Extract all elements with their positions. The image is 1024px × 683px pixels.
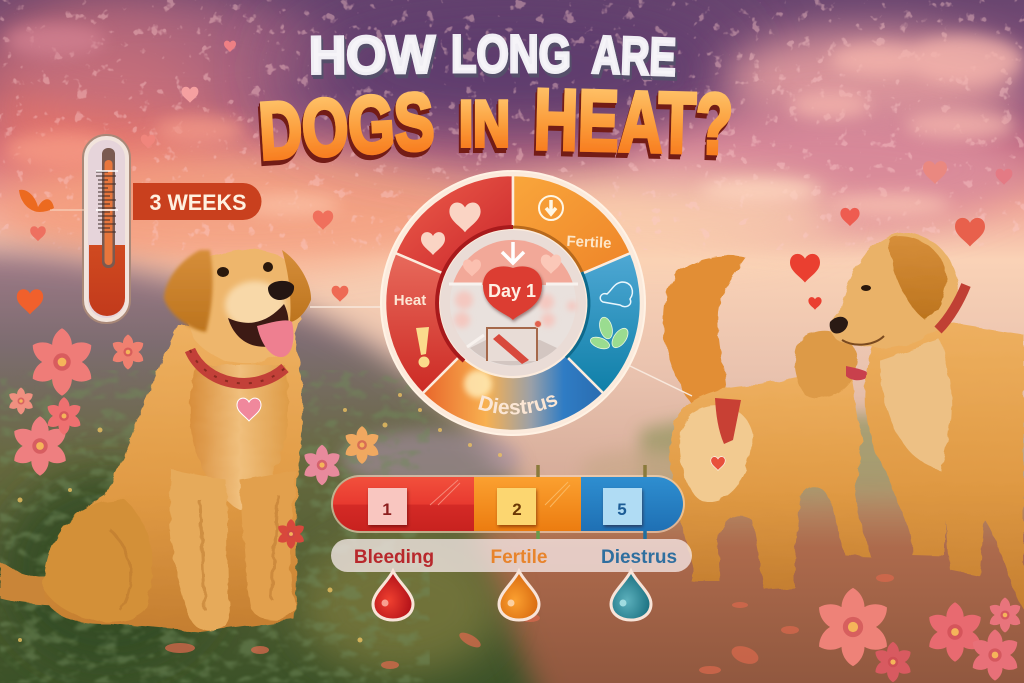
fallen petals xyxy=(165,574,894,674)
middle dog tongue and nose xyxy=(846,366,870,380)
icon: small sketch frame with pencil xyxy=(487,320,542,364)
right dog body xyxy=(865,320,1024,610)
cycle wheel xyxy=(380,170,646,436)
bar: bleeding segment xyxy=(333,477,474,531)
timeline labels xyxy=(331,539,692,572)
bar: fertile segment xyxy=(474,477,581,531)
segment: diestrus: Diestrus xyxy=(478,395,558,414)
thermometer liquid xyxy=(89,245,125,316)
timeline bar xyxy=(331,465,685,539)
bar: fertile segment: 2 xyxy=(512,500,522,519)
title line 2 xyxy=(257,72,734,177)
hills and meadow xyxy=(0,232,1024,683)
icon: teal drop xyxy=(611,571,651,620)
right dog collar xyxy=(938,285,966,330)
middle dog tail tag xyxy=(715,398,741,444)
icon: red flower beside left dog xyxy=(276,519,306,549)
icon: orange butterfly heart with leader xyxy=(19,190,85,212)
segment: heat: Heat xyxy=(394,292,426,309)
duration label xyxy=(133,183,262,220)
thermometer scale xyxy=(96,172,116,232)
middle dog heart tag xyxy=(711,457,725,470)
segment: fertile: Fertile xyxy=(566,233,612,252)
title xyxy=(257,25,734,177)
bar: bleeding segment: 1 xyxy=(382,500,392,519)
thermometer xyxy=(83,135,130,323)
segment: blue xyxy=(565,253,641,394)
right dog head xyxy=(830,232,958,349)
title line 2: HEAT? xyxy=(533,72,734,173)
floating hearts xyxy=(17,41,1012,372)
title line 1: LONG xyxy=(451,25,571,84)
thermometer inner tube xyxy=(102,148,115,268)
title line 2: DOGS xyxy=(257,77,437,177)
duration label: 3 WEEKS xyxy=(150,190,246,215)
middle golden retriever seen from behind xyxy=(664,256,870,590)
Day 1 heart xyxy=(483,266,542,320)
timeline labels: Diestrus xyxy=(601,547,677,568)
Day 1 heart: Day 1 xyxy=(488,281,536,301)
left sitting golden retriever xyxy=(0,248,311,632)
right golden retriever xyxy=(830,232,1024,610)
timeline labels: Bleeding xyxy=(354,547,434,568)
segment: fertile xyxy=(513,175,631,274)
title line 2: IN xyxy=(459,87,510,160)
bar: diestrus segment: 5 xyxy=(617,500,627,519)
icon: arrow into Day 1 xyxy=(502,242,524,263)
segment: heat xyxy=(385,253,461,394)
wheel inner hub xyxy=(437,227,589,376)
title line 1 xyxy=(309,25,677,87)
segment: diestrus xyxy=(424,357,604,430)
meadow flowers xyxy=(7,328,1023,682)
thermometer mercury xyxy=(104,160,112,265)
title line 1: HOW xyxy=(309,25,435,86)
timeline labels: Fertile xyxy=(490,547,548,568)
title line 1: ARE xyxy=(591,26,677,87)
icon: orange drop xyxy=(499,571,539,620)
leader lines xyxy=(310,307,692,396)
tail xyxy=(664,256,746,405)
tick marks xyxy=(538,465,645,477)
left dog body xyxy=(0,325,303,632)
icon: red drop xyxy=(373,571,413,620)
clouds xyxy=(5,24,1024,217)
bar: diestrus segment xyxy=(581,477,683,531)
segment: red hearts xyxy=(395,175,513,274)
left dog head xyxy=(164,248,311,364)
left dog collar xyxy=(190,350,285,421)
